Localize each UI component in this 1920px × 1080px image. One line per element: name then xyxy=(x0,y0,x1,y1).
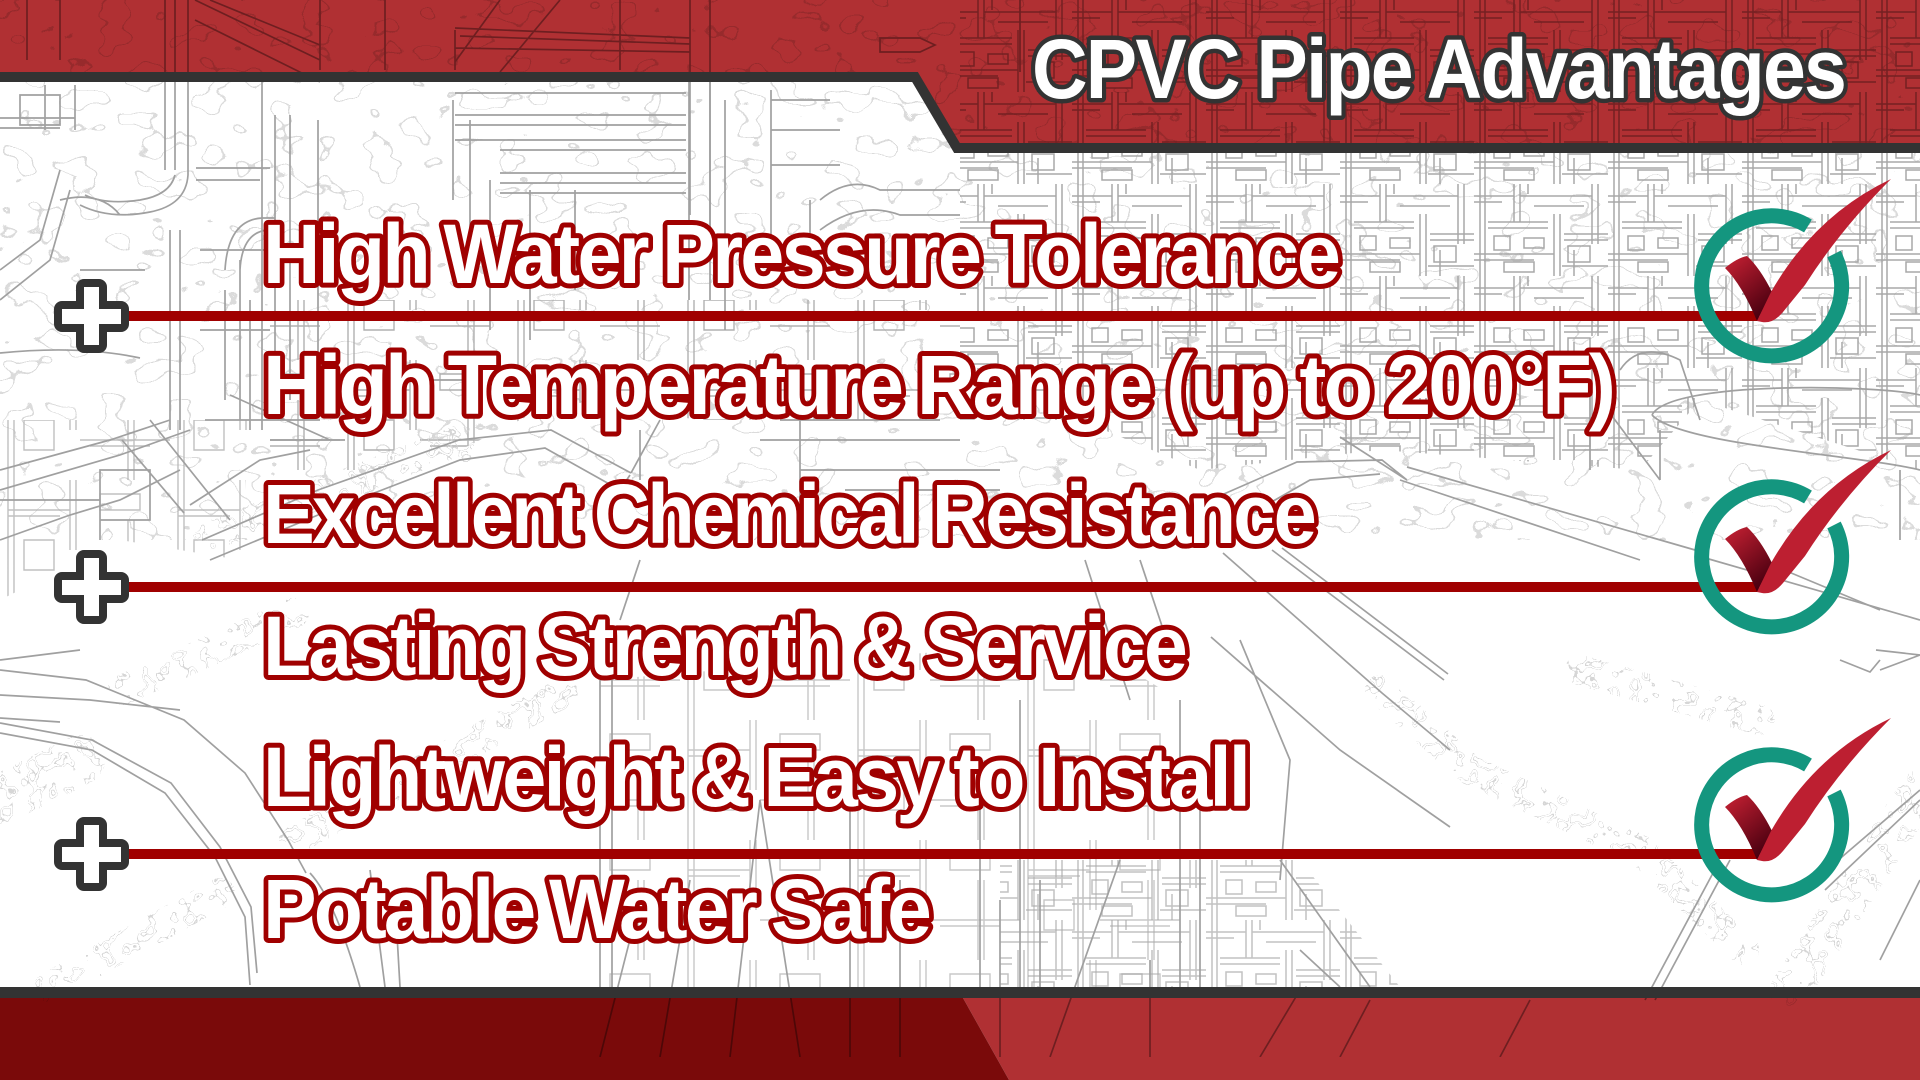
icon: check mark 2 xyxy=(1702,450,1891,627)
footer band xyxy=(0,987,1920,1080)
title: CPVC Pipe Advantages xyxy=(1032,22,1845,116)
advantage: lightweight and easy to install: Lightweight & Easy to Install xyxy=(263,730,1248,824)
advantage: potable water safe: Potable Water Safe xyxy=(263,862,929,956)
icon: check mark 3 xyxy=(1702,718,1891,895)
divider and plus icon row 2 xyxy=(62,558,1759,616)
divider and plus icon row 1 xyxy=(62,287,1759,345)
header band xyxy=(0,0,1920,148)
advantage: high temperature range: High Temperature Range (up to 200°F) xyxy=(263,338,1613,432)
divider and plus icon row 3 xyxy=(62,825,1759,883)
advantage: high water pressure tolerance: High Water Pressure Tolerance xyxy=(263,207,1338,301)
icon: check mark 1 xyxy=(1702,179,1891,356)
advantage: excellent chemical resistance: Excellent Chemical Resistance xyxy=(263,467,1314,561)
advantage: lasting strength and service: Lasting Strength & Service xyxy=(263,599,1185,693)
